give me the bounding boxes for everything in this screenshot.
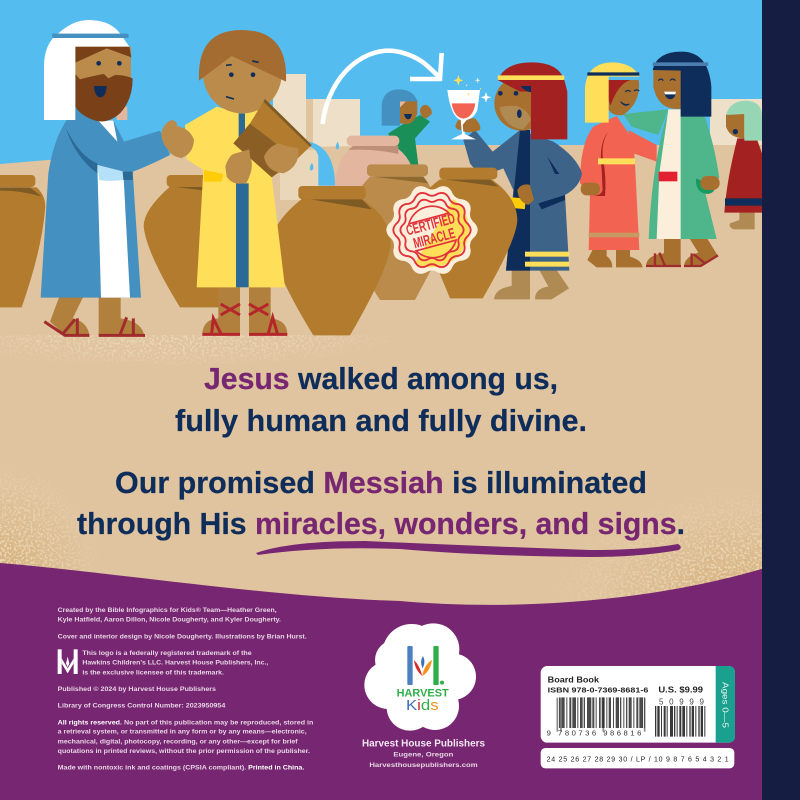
seal text: miracle: MIRACLE bbox=[412, 226, 457, 252]
figure: worried man in yellow robe pouring water bbox=[185, 30, 339, 334]
rights notice: mechanical, digital, photocopy, recording, or any other—except for brief bbox=[58, 738, 299, 745]
certified miracle seal bbox=[386, 186, 478, 274]
credits: Created by the Bible Infographics for Kids® Team—Heather Green, bbox=[58, 606, 277, 614]
rights notice: a retrieval system, or transmitted in any form or by any means—electronic, bbox=[58, 729, 307, 736]
pottery jars row bbox=[0, 136, 517, 335]
rights notice: All rights reserved. No part of this publication may be reproduced, stored in bbox=[58, 719, 313, 726]
hand on robe bbox=[517, 184, 534, 205]
publication details: Published © 2024 by Harvest House Publishers bbox=[58, 685, 217, 693]
small figure: child in green waving bbox=[382, 89, 432, 165]
trademark notice: Hawkins Children’s LLC. Harvest House Publishers, Inc., bbox=[82, 660, 269, 667]
jar: far left bbox=[0, 175, 45, 307]
main barcode digits: 9 780736 986816 bbox=[547, 728, 641, 737]
brand: Kids: Kids bbox=[406, 698, 439, 714]
feet bbox=[494, 270, 569, 299]
trademark logo bbox=[58, 649, 78, 674]
figure: smiling man in green robe bbox=[623, 52, 720, 266]
distant buildings bbox=[273, 74, 762, 169]
trademark notice bbox=[82, 650, 269, 676]
wooden water container bbox=[233, 99, 312, 177]
copyright text block bbox=[58, 606, 313, 772]
small figure: child at far right bbox=[724, 101, 762, 229]
rights notice: quotations in printed reviews, without the prior permission of the publisher. bbox=[58, 748, 310, 755]
jar: behind yellow figure bbox=[144, 175, 220, 307]
H logo mark bbox=[407, 646, 444, 685]
location: Eugene, Oregon bbox=[393, 752, 453, 759]
format label: Board Book bbox=[548, 675, 600, 684]
purple footer band bbox=[0, 563, 765, 800]
barcode card bbox=[541, 666, 735, 743]
robe bbox=[41, 107, 170, 298]
head bbox=[44, 20, 133, 121]
figure: man in blue robe holding goblet bbox=[447, 62, 582, 299]
head bbox=[199, 30, 286, 113]
navy spine bbox=[762, 0, 800, 800]
rights notice bbox=[58, 719, 313, 755]
safety and origin note: Made with nontoxic ink and coatings (CPSIA compliant). Printed in China. bbox=[58, 765, 305, 772]
white cloud bbox=[364, 623, 476, 731]
brand: Harvest: HARVEST bbox=[397, 688, 449, 700]
sparkles bbox=[453, 75, 491, 103]
website: Harvesthousepublishers.com bbox=[369, 762, 478, 769]
sand ground bbox=[0, 145, 762, 598]
hand on goblet bbox=[455, 118, 480, 132]
Jesus hand on shoulder bbox=[161, 120, 194, 158]
line: through His miracles: through His miracles, wonders, and signs. bbox=[77, 506, 685, 541]
line: Our promised Messiah: Our promised Messiah is illuminated bbox=[115, 465, 647, 500]
line: fully human and fully divine: fully human and fully divine. bbox=[175, 403, 587, 438]
credits bbox=[58, 606, 307, 640]
hands bbox=[225, 143, 298, 184]
feet and sandals bbox=[202, 287, 287, 334]
feet and sandals bbox=[646, 237, 718, 266]
hand bbox=[581, 183, 600, 195]
supplement barcode bbox=[655, 675, 707, 767]
age tab bbox=[716, 666, 735, 743]
feet bbox=[587, 248, 643, 267]
age tab: Ages 0—5 bbox=[720, 682, 730, 728]
main barcode bbox=[557, 698, 645, 732]
line: Jesus walked among us: Jesus walked among us, bbox=[204, 361, 558, 396]
seal arcs bbox=[406, 202, 459, 262]
printing number card bbox=[541, 748, 734, 768]
water pouring bbox=[309, 142, 339, 186]
trademark notice: This logo is a federally registered trademark of the bbox=[82, 650, 252, 657]
publication details: Library of Congress Control Number: 2023950954 bbox=[58, 703, 226, 710]
jar: lighter, behind seal bbox=[341, 164, 444, 300]
pink jar bbox=[335, 136, 417, 187]
feet and sandals bbox=[44, 297, 145, 335]
robe bbox=[580, 116, 639, 250]
jar: right of seal bbox=[418, 168, 517, 298]
credits: Kyle Hatfield, Aaron Dillon, Nicole Dougherty, and Kyler Dougherty. bbox=[58, 617, 281, 624]
brush underline bbox=[256, 541, 681, 557]
head bbox=[585, 62, 639, 123]
robe bbox=[185, 107, 285, 287]
head bbox=[653, 52, 711, 117]
hand bbox=[700, 176, 720, 190]
publication details bbox=[58, 685, 226, 710]
trademark notice: is the exclusive licensee of this trademark. bbox=[82, 669, 224, 676]
robe bbox=[463, 130, 582, 271]
publisher logo and address bbox=[362, 623, 485, 769]
headline text block bbox=[77, 361, 685, 541]
figure: woman in coral robe bbox=[580, 62, 657, 267]
jar: large front bbox=[272, 186, 391, 335]
credits: Cover and interior design by Nicole Dougherty. Illustrations by Brian Hurst. bbox=[58, 633, 307, 640]
figure: Jesus in blue robe and white headdress bbox=[41, 20, 170, 335]
head bbox=[494, 62, 567, 139]
supplement digits: 50999 bbox=[659, 698, 705, 707]
publisher name: Harvest House Publishers bbox=[362, 739, 485, 750]
price: U.S. $9.99 bbox=[658, 684, 703, 694]
robe bbox=[623, 109, 668, 135]
arm behind bbox=[628, 130, 657, 162]
seal text: certified: CERTIFIED bbox=[404, 211, 457, 239]
goblet with wine bbox=[447, 90, 480, 139]
printing number card: 24 25 26 27 28 29 30 / LP / 10 9 8 7 6 5 4 3 2 1 bbox=[547, 756, 729, 763]
curved arrow from water to wine bbox=[322, 51, 442, 124]
ISBN: ISBN 978-0-7369-8681-6 bbox=[548, 685, 648, 694]
sky background bbox=[0, 0, 800, 340]
